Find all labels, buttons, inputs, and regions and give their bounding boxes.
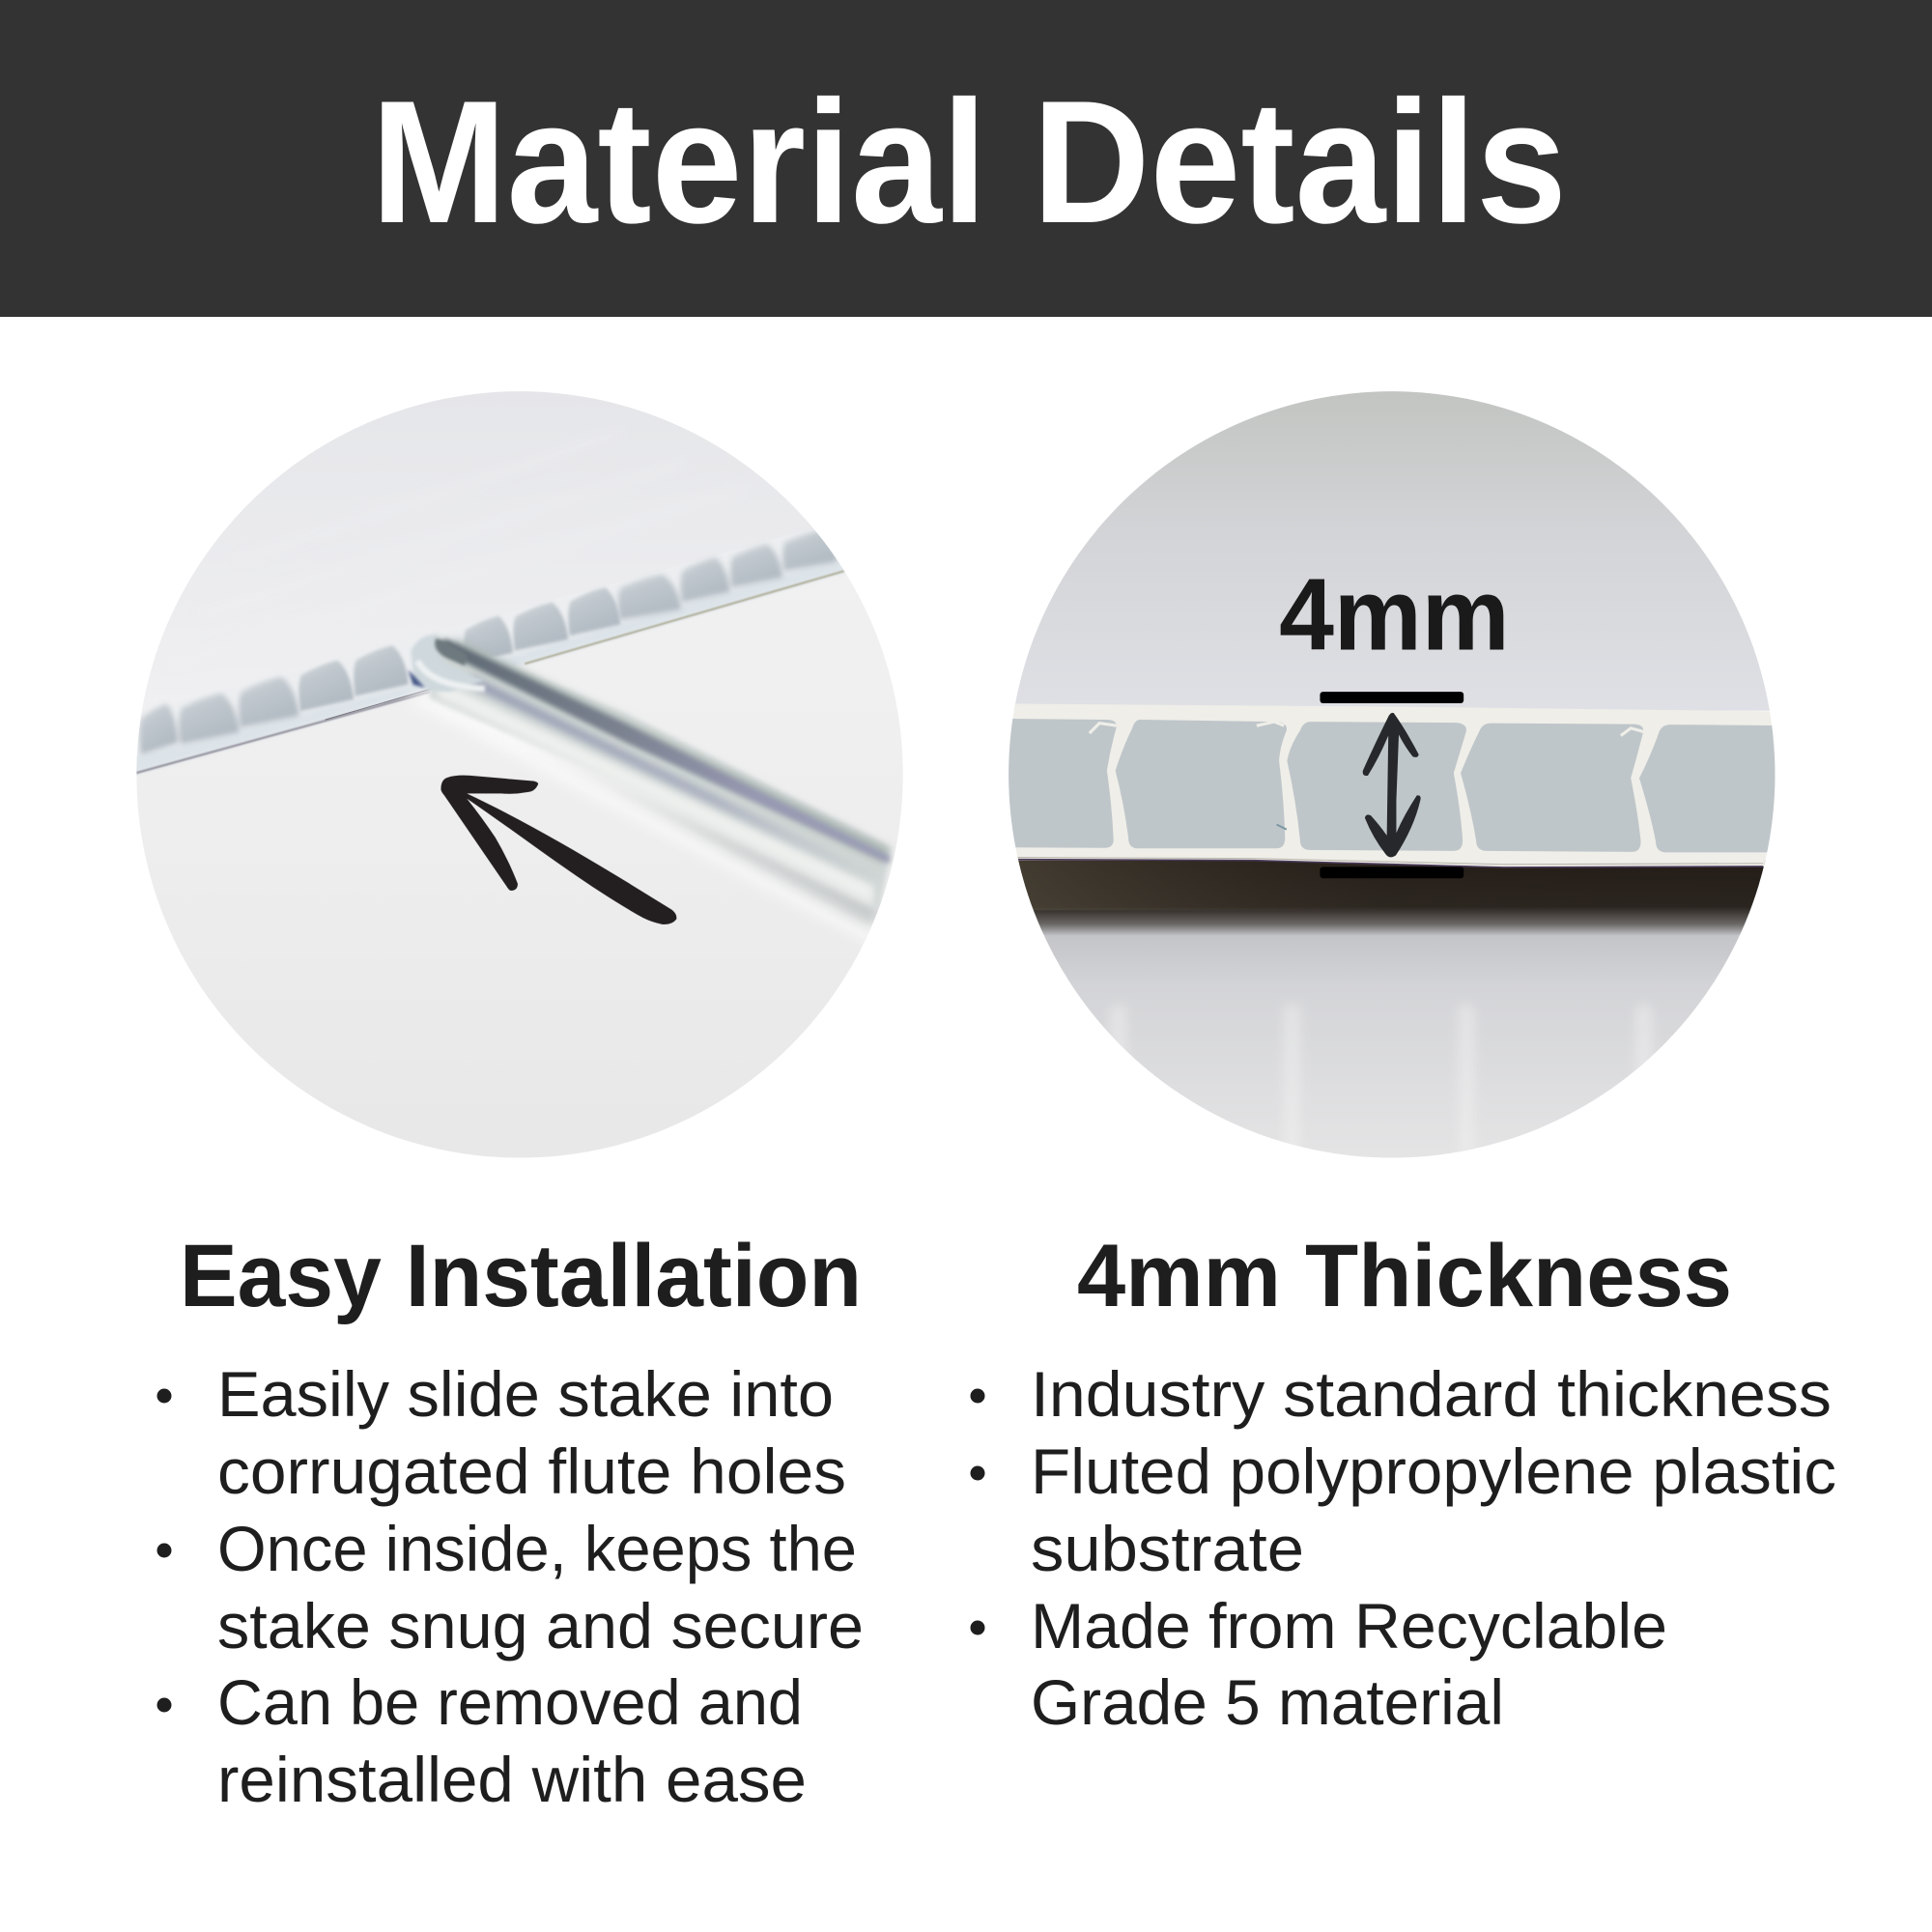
measure bar: top — [1320, 692, 1463, 703]
bullet list: 4mm thickness: substrate — [1031, 1513, 1304, 1584]
bullet list: 4mm thickness: Industry standard thickness — [1031, 1358, 1832, 1430]
label: 4mm: 4mm — [1279, 558, 1510, 672]
icon: double-headed arrow — [1363, 713, 1421, 857]
measure bar: bottom — [1320, 867, 1463, 878]
bullet list: easy installation: Can be removed and — [217, 1666, 803, 1738]
bullet list: easy installation: Once inside, keeps the — [217, 1513, 857, 1584]
panel: 4mm thickness photo — [1005, 386, 1803, 1184]
bullet list: easy installation: reinstalled with ease — [217, 1744, 807, 1815]
title: Material Details — [371, 65, 1567, 260]
bullet list: 4mm thickness: Made from Recyclable — [1031, 1590, 1667, 1662]
bullet list: easy installation: corrugated flute holes — [217, 1435, 846, 1507]
header banner — [0, 0, 1932, 317]
bullet list: easy installation — [156, 1358, 864, 1815]
bullet list: 4mm thickness: Fluted polypropylene plastic — [1031, 1435, 1836, 1507]
heading: 4mm thickness: 4mm Thickness — [1077, 1227, 1732, 1325]
floor reflections — [1113, 1008, 1650, 1103]
bullet list: easy installation: Easily slide stake into — [217, 1358, 834, 1430]
flute edge of the board — [126, 527, 854, 778]
metal stake — [405, 635, 894, 945]
icon: hand-drawn arrow pointing at stake — [440, 776, 676, 924]
bullet list: 4mm thickness — [970, 1358, 1836, 1738]
panel: easy installation photo — [126, 386, 923, 1184]
bullet list: 4mm thickness: Grade 5 material — [1031, 1666, 1504, 1738]
corrugated board cross-section — [1005, 703, 1803, 867]
bullet list: easy installation: stake snug and secure — [217, 1590, 864, 1662]
heading: easy installation: Easy Installation — [180, 1227, 862, 1325]
